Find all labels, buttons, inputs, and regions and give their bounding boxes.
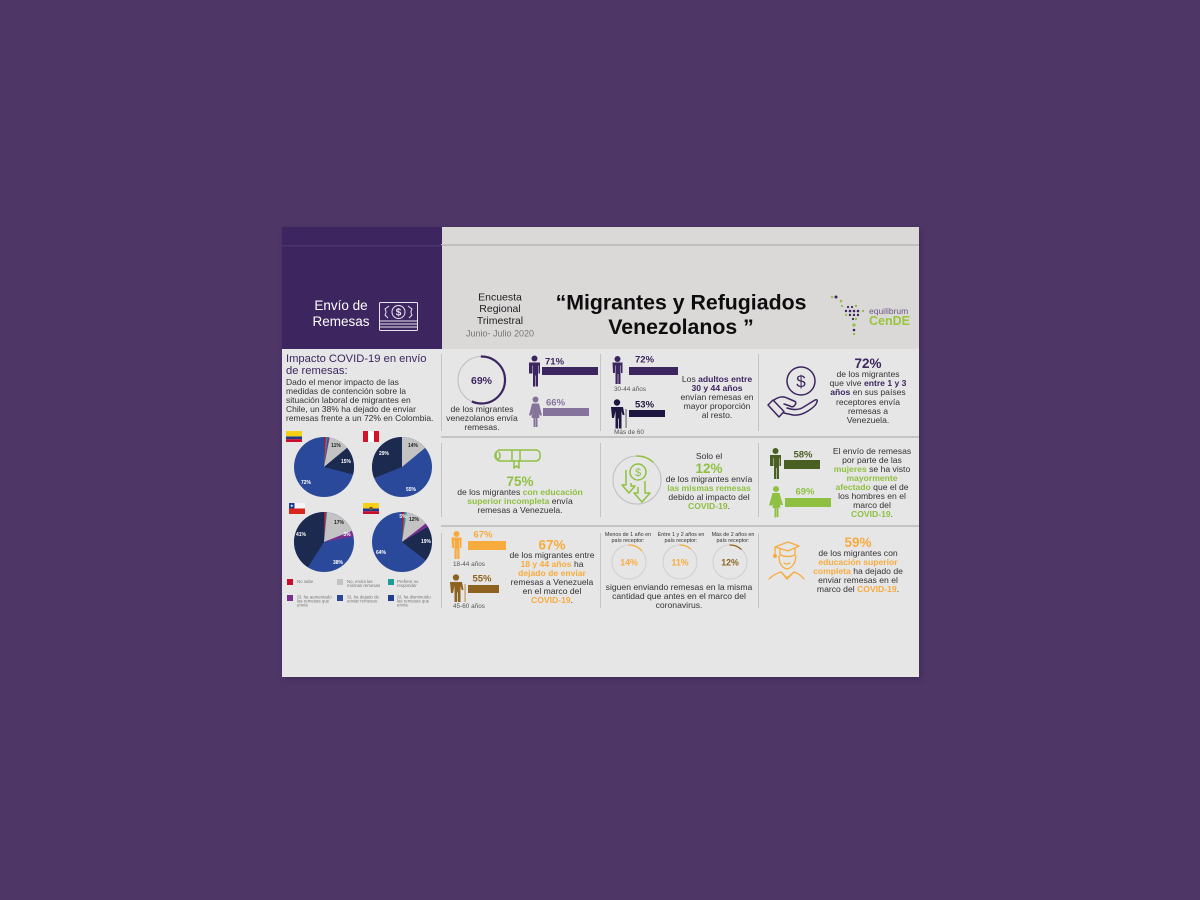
panel: 69% donut: venezolanos envía [446, 413, 518, 423]
text: 59%: marco del COVID-19. [817, 584, 899, 594]
icon: banknotes [380, 302, 418, 330]
text: mujeres: mayormente [846, 473, 898, 483]
panel: 69% donut: remesas. [464, 422, 500, 432]
legend: las remesas que [397, 598, 430, 604]
bar: 69% [785, 486, 831, 507]
bar: 72% [614, 354, 678, 393]
icon: hand with dollar [768, 367, 817, 417]
text: 67% orange: dejado de enviar [518, 568, 587, 578]
text: adultos [680, 374, 754, 420]
pie chart: Colombia [294, 437, 354, 497]
panel: impacto COVID-19: Impacto COVID-19 en envío [286, 353, 427, 365]
bar: 66% [543, 398, 589, 416]
icon: falling money in ring [613, 456, 661, 504]
pie chart: Colombia: 15% [341, 459, 352, 465]
text: 12%: las mismas remesas [667, 483, 751, 493]
survey label: Junio- Julio 2020 [466, 328, 534, 338]
pie chart: Colombia: 72% [301, 480, 312, 486]
text: 59%: completa ha dejado de [813, 566, 903, 576]
icon: graduate [769, 542, 804, 579]
ring: 12% [712, 532, 754, 579]
card shadow [284, 230, 921, 679]
legend [287, 579, 431, 608]
legend: envía [297, 602, 308, 608]
legend: mismas remesas [347, 583, 381, 588]
icon: falling money in ring: $ [635, 467, 641, 479]
bar: 72%: 72% [635, 354, 655, 366]
bar: 55% brown: 45-60 años [453, 603, 485, 610]
legend: Sí, ha dejado de [347, 594, 380, 600]
bar: 72%: 30-44 años [614, 386, 646, 393]
text: 12%: 12% [695, 461, 723, 476]
panel: impacto COVID-19 [286, 353, 433, 423]
flag: Perú [363, 431, 379, 442]
text: 67% orange: en el marco del [523, 586, 581, 596]
title: Venezolanos ” [608, 315, 754, 339]
ring: 12%: 12% [721, 558, 739, 568]
ring: 14%: 14% [620, 558, 638, 568]
heading: envío de remesas [312, 298, 370, 329]
text: 12%: COVID-19. [688, 501, 730, 511]
text: 67% orange: COVID-19. [531, 595, 573, 605]
panel: impacto COVID-19: Dado el menor impacto de las [286, 377, 399, 387]
panel: 69% donut [446, 356, 518, 432]
bar: 69%: 69% [795, 486, 815, 498]
bar: 66%: 66% [546, 398, 566, 408]
text: adultos: mayor proporción [684, 401, 751, 411]
text: 72% receptores: remesas a [848, 406, 888, 416]
ring: 11% [658, 532, 704, 579]
icon: man 30-44 [612, 356, 622, 384]
text: adultos: envían remesas en [680, 392, 754, 402]
text: 12%: de los migrantes envía [666, 474, 752, 484]
text: 59%: enviar remesas en el [818, 575, 898, 585]
text: mujeres: COVID-19. [851, 509, 893, 519]
bar: 71% [542, 356, 598, 375]
text: 59%: educación superior [818, 557, 898, 567]
ring: 11%: Entre 1 y 2 años en [658, 532, 704, 538]
text: 59% [813, 535, 903, 594]
text: adultos: al resto. [702, 410, 732, 420]
pie chart: Ecuador: 19% [421, 539, 432, 545]
ring: 11%: país receptor: [665, 538, 697, 544]
survey label: Trimestral [477, 315, 523, 327]
icon: elderly man brown [450, 574, 466, 602]
icon: diploma [495, 450, 540, 468]
flag: Chile [289, 503, 305, 514]
ring: 11%: 11% [671, 558, 689, 568]
text: 75%: 75% [506, 474, 534, 489]
dividers [441, 354, 919, 608]
survey label [466, 292, 534, 338]
text: mujeres: afectado que el de [835, 482, 909, 492]
ring: 14%: Menos de 1 año en [605, 532, 651, 538]
text: mujeres: El envío de remesas [833, 446, 911, 456]
pie chart: Chile: 17% [334, 520, 345, 526]
text: 75%: de los migrantes con educación [457, 487, 583, 497]
panel: 69% donut: 69% [471, 375, 493, 387]
legend: envía [397, 602, 408, 608]
text: 12% [666, 451, 752, 511]
text: 59%: de los migrantes con [818, 548, 898, 558]
panel: 69% donut: de los migrantes [450, 404, 514, 414]
pie chart: Colombia: 11% [331, 443, 341, 449]
legend: No sabe [297, 579, 314, 584]
icon: man 18-44 [452, 531, 462, 559]
icon: hand with dollar: $ [796, 372, 806, 391]
pie chart: Chile: 3% [343, 532, 351, 538]
icon: banknotes: $ [396, 308, 402, 318]
text: 67% orange [509, 538, 595, 605]
panel: impacto COVID-19: remesas frente a un 72% en Colombia. [286, 413, 433, 423]
text: mujeres [833, 446, 911, 519]
bar: 53%: Más de 60 [614, 429, 644, 436]
bar: 55% brown [453, 574, 499, 610]
icon: woman 69% [769, 486, 783, 518]
text: 72% receptores: de los migrantes [836, 369, 900, 379]
pie chart: Perú: 55% [406, 487, 417, 493]
legend: Sí, ha aumentado [297, 594, 332, 600]
ring: 12%: Más de 2 años en [712, 532, 754, 538]
icon: man 71% [529, 356, 540, 386]
bar: 67% orange: 67% [473, 530, 493, 540]
panel: impacto COVID-19: de remesas: [286, 365, 348, 377]
heading: envío de remesas: Remesas [312, 314, 370, 329]
text: mujeres: mujeres se ha visto [834, 464, 910, 474]
text: 72% receptores: 72% [854, 356, 882, 371]
legend: enviar remesas [347, 598, 378, 604]
text: 75%: remesas a Venezuela. [477, 505, 563, 515]
pie chart: Ecuador: 12% [409, 517, 420, 523]
text: 72% receptores [830, 356, 907, 425]
text: 59%: 59% [844, 535, 872, 550]
bar: 71%: 71% [545, 356, 565, 368]
logo: equilibrium CenDE: CenDE [869, 314, 910, 328]
text: 72% receptores: años en sus países [830, 387, 906, 397]
legend: Sí, ha disminuido [397, 594, 431, 600]
pie chart: Perú: 29% [379, 451, 390, 457]
pie chart: Perú [372, 437, 432, 497]
pie chart: Chile [294, 512, 354, 572]
text: mujeres: marco del [853, 500, 891, 510]
text: 12%: Solo el [696, 451, 722, 461]
pie chart: Perú: 14% [408, 443, 419, 449]
text: siguen enviando [606, 582, 753, 610]
text: 72% receptores: receptores envía [836, 397, 900, 407]
text: siguen enviando: coronavirus. [656, 600, 702, 610]
title: “Migrantes y Refugiados [556, 290, 806, 314]
text: 75% [457, 474, 583, 515]
infographic card [282, 227, 919, 677]
text: 12%: debido al impacto del [668, 492, 750, 502]
pie chart: Chile: 41% [296, 532, 307, 538]
icon: woman 66% [529, 396, 542, 427]
bar: 67% orange [453, 530, 506, 568]
ring: 14% [605, 532, 651, 579]
bar: 58% [784, 450, 820, 469]
text: 67% orange: de los migrantes entre [509, 550, 595, 560]
icon: man 58% [770, 448, 781, 479]
text: siguen enviando: cantidad que antes en el marco del [612, 591, 746, 601]
legend: Prefiere no [397, 579, 419, 584]
text: adultos: Los adultos entre [682, 374, 752, 384]
bar: 53% [614, 400, 665, 436]
ring: 14%: país receptor: [612, 538, 644, 544]
ring: 12%: país receptor: [717, 538, 749, 544]
pie chart: Ecuador: 5% [399, 514, 407, 520]
survey label: Encuesta [478, 292, 522, 304]
heading: envío de remesas: Envío de [314, 298, 368, 313]
pie chart: Ecuador [372, 512, 432, 572]
panel: impacto COVID-19: medidas de contención sobre la [286, 386, 406, 396]
pie chart: Ecuador: 64% [376, 550, 387, 556]
logo: equilibrium CenDE: equilibrum [869, 306, 908, 316]
text: 75%: superior incompleta envía [467, 496, 573, 506]
legend: responder [397, 583, 417, 588]
panel: impacto COVID-19: situación laboral de migrantes en [286, 395, 411, 405]
bar: 55% brown: 55% [472, 574, 492, 584]
flag: Colombia [286, 431, 302, 442]
survey label: Regional [479, 303, 521, 315]
header band [282, 227, 919, 349]
legend: las remesas que [297, 598, 330, 604]
panel: impacto COVID-19: Chile, un 38% ha dejado de enviar [286, 404, 416, 414]
pie chart: Chile: 38% [333, 560, 344, 566]
text: adultos: 30 y 44 años [691, 383, 743, 393]
bar: 67% orange: 18-44 años [453, 561, 485, 568]
bar: 53%: 53% [635, 400, 655, 410]
logo: equilibrium CenDE [831, 296, 910, 335]
icon: elderly man [611, 399, 627, 428]
text: 67% orange: 18 y 44 años ha [520, 559, 584, 569]
text: 67% orange: remesas a Venezuela [511, 577, 594, 587]
text: 72% receptores: Venezuela. [847, 415, 889, 425]
text: mujeres: los hombres en el [838, 491, 906, 501]
title [556, 290, 806, 339]
legend: No, envía las [347, 579, 373, 584]
bar: 58%: 58% [793, 450, 813, 460]
text: 72% receptores: que vive entre 1 y 3 [830, 378, 907, 388]
text: mujeres: por parte de las [842, 455, 902, 465]
text: 67% orange: 67% [538, 538, 566, 552]
flag: Ecuador [363, 503, 379, 514]
text: siguen enviando: siguen enviando remesas en la misma [606, 582, 753, 592]
